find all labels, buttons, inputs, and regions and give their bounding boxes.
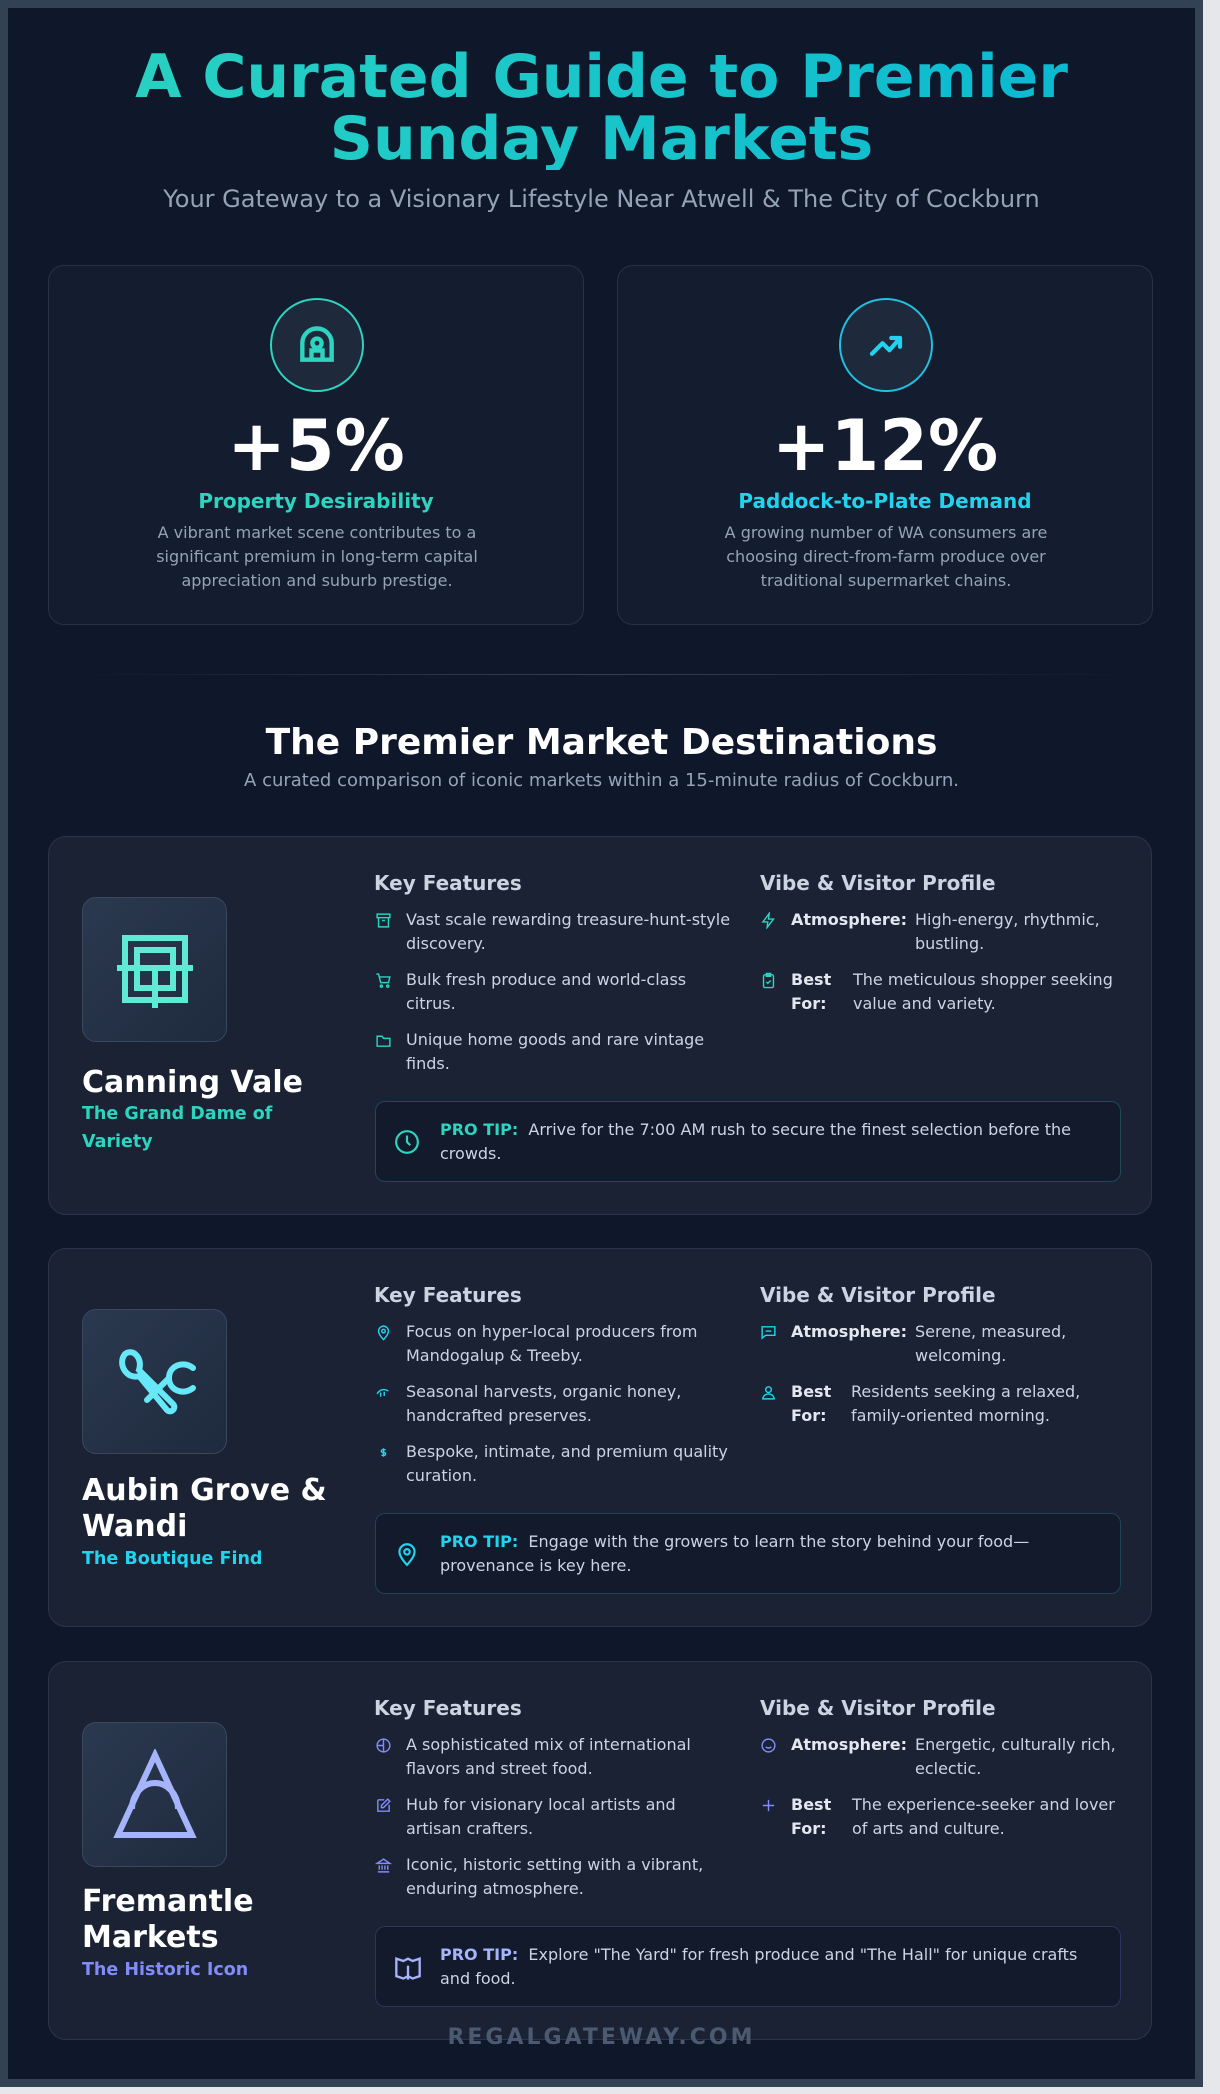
vibe: best for: For: [791, 1819, 827, 1838]
vibe: best for: Residents seeking a relaxed, family-oriented morning. [851, 1382, 1080, 1425]
market name: Canning Vale [82, 1065, 303, 1100]
section subtitle: A curated comparison of iconic markets within a 15-minute radius of Cockburn. [244, 770, 959, 791]
feature 1: Vast scale rewarding treasure-hunt-style discovery. [406, 910, 730, 953]
footer brand: REGALGATEWAY.COM [447, 2025, 756, 2050]
market tagline: The Grand Dame of Variety [82, 1104, 272, 1152]
market tagline: The Historic Icon [82, 1960, 248, 1980]
heading: vibe: Vibe & Visitor Profile [760, 871, 996, 895]
stat card: paddock-to-plate [617, 265, 1153, 625]
heading: vibe: Vibe & Visitor Profile [760, 1696, 996, 1720]
callout: pro tip [375, 1926, 1121, 2007]
vibe: atmosphere [761, 1735, 1116, 1778]
icon: market grid [82, 897, 227, 1042]
stat label: Paddock-to-Plate Demand [738, 489, 1032, 513]
stat card: property desirability [48, 265, 584, 625]
feature 1: A sophisticated mix of international flavors and street food. [406, 1735, 691, 1778]
callout: pro tip [375, 1513, 1121, 1594]
panel: Fremantle Markets [48, 1661, 1152, 2040]
vibe: atmosphere: Serene, measured, welcoming. [915, 1322, 1066, 1365]
stat value: +5% [227, 405, 405, 487]
icon: home [270, 298, 364, 392]
market name: Fremantle [82, 1884, 254, 1919]
vibe: best for: Best [791, 970, 831, 989]
vibe: best for: The experience-seeker and lover of arts and culture. [852, 1795, 1115, 1838]
callout: pro tip: PRO TIP: Explore "The Yard" for fresh produce and "The Hall" for unique crafts and food. [440, 1945, 1077, 1988]
title: A Curated Guide to Premier [135, 42, 1068, 112]
feature 2: Bulk fresh produce and world-class citrus. [406, 970, 686, 1013]
vibe: best for: For: [791, 1406, 827, 1425]
stat value: +12% [772, 405, 998, 487]
title: Sunday Markets [330, 104, 873, 174]
vibe: atmosphere: Atmosphere: [791, 1735, 907, 1754]
market name: Wandi [82, 1509, 187, 1544]
stat description: A growing number of WA consumers are choosing direct-from-farm produce over traditional supermarket chains. [725, 523, 1047, 590]
vibe: atmosphere: Energetic, culturally rich, eclectic. [915, 1735, 1116, 1778]
heading: key features: Key Features [374, 1283, 522, 1307]
vibe: best for: For: [791, 994, 827, 1013]
icon: trend up [839, 298, 933, 392]
title [0, 46, 1203, 170]
vibe: atmosphere [762, 910, 1100, 953]
section heading: The Premier Market Destinations [266, 722, 937, 763]
panel: Aubin Grove & Wandi [48, 1248, 1152, 1627]
heading: vibe: Vibe & Visitor Profile [760, 1283, 996, 1307]
vibe: best for: The meticulous shopper seeking value and variety. [853, 970, 1113, 1013]
callout: pro tip: PRO TIP: Arrive for the 7:00 AM rush to secure the finest selection before the crowds. [440, 1120, 1071, 1163]
market name: Aubin Grove & [82, 1473, 327, 1508]
callout: pro tip [375, 1101, 1121, 1182]
vibe: best for: Best [791, 1382, 831, 1401]
market name [82, 1884, 254, 1955]
vibe: atmosphere: Atmosphere: [791, 1322, 907, 1341]
vibe: best for: Best [791, 1795, 831, 1814]
stat label: Property Desirability [198, 489, 434, 513]
icon: tools [82, 1309, 227, 1454]
stat description: A vibrant market scene contributes to a significant premium in long-term capital appreciation and suburb prestige. [156, 523, 478, 590]
subtitle: Your Gateway to a Visionary Lifestyle Near Atwell & The City of Cockburn [163, 185, 1040, 213]
feature 3: Iconic, historic setting with a vibrant, enduring atmosphere. [406, 1855, 703, 1898]
callout: pro tip: PRO TIP: Engage with the growers to learn the story behind your food—provenance is key here. [440, 1532, 1029, 1575]
market tagline: The Boutique Find [82, 1549, 262, 1569]
vibe: atmosphere [761, 1322, 1066, 1365]
panel: Canning Vale [48, 836, 1152, 1215]
feature 2: Hub for visionary local artists and artisan crafters. [406, 1795, 676, 1838]
market name: Markets [82, 1920, 219, 1955]
vibe: atmosphere: High-energy, rhythmic, bustling. [915, 910, 1100, 953]
feature 3: Unique home goods and rare vintage finds. [406, 1030, 704, 1073]
icon: arch [82, 1722, 227, 1867]
feature 1: Focus on hyper-local producers from Mandogalup & Treeby. [406, 1322, 697, 1365]
market name [82, 1473, 327, 1544]
heading: key features: Key Features [374, 871, 522, 895]
vibe: atmosphere: Atmosphere: [791, 910, 907, 929]
feature 3: Bespoke, intimate, and premium quality curation. [406, 1442, 728, 1485]
feature 2: Seasonal harvests, organic honey, handcrafted preserves. [406, 1382, 681, 1425]
heading: key features: Key Features [374, 1696, 522, 1720]
